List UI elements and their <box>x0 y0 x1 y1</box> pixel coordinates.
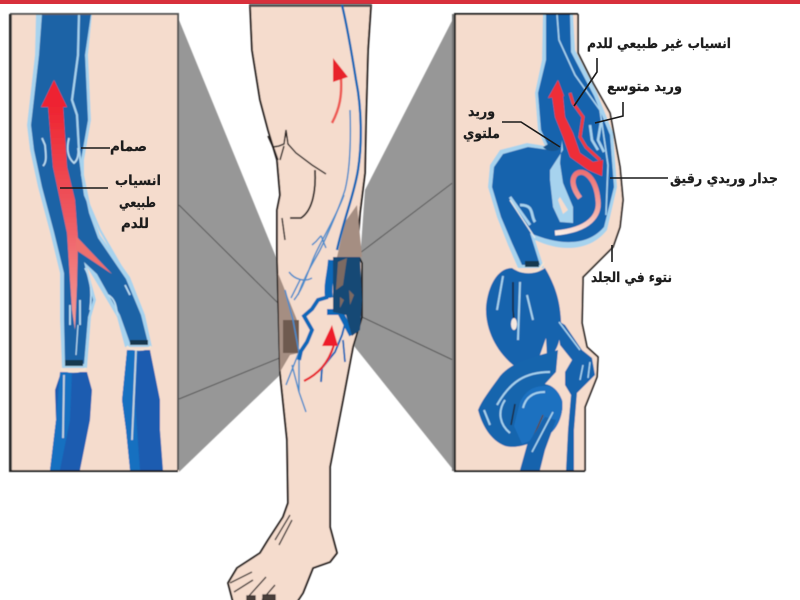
varicose vein on leg <box>299 260 352 382</box>
coil two <box>478 350 563 447</box>
valve ring and dark band <box>525 261 539 267</box>
knee lines <box>268 130 326 240</box>
label: normal blood flow: طبيعي <box>119 195 156 211</box>
transparent cone tip right <box>337 205 362 257</box>
lower left vein <box>50 372 92 470</box>
label: normal blood flow: للدم <box>121 216 149 232</box>
upper bulge blue <box>492 14 614 265</box>
healthy vein blue <box>31 14 148 364</box>
upper bulge light wall <box>488 14 617 268</box>
label: dilated vein: وريد متوسع <box>607 79 682 95</box>
lower right vein <box>122 350 163 470</box>
toes <box>230 515 292 600</box>
label: twisted vein: وريد <box>468 104 495 120</box>
valve cusps <box>42 138 78 166</box>
red arrow lower <box>304 325 338 381</box>
red arrow upper <box>332 58 348 123</box>
healthy vein light wall <box>27 14 152 368</box>
abnormal flow arrows <box>548 80 603 233</box>
dark varicose cluster <box>333 257 362 336</box>
panel: healthy vein <box>10 14 179 471</box>
label: thin vein wall: جدار وريدي رقيق <box>670 171 778 188</box>
transparent cone tip left <box>278 273 299 372</box>
labels: all text <box>110 36 778 286</box>
skin outline <box>578 14 623 471</box>
label: abnormal blood flow: انسياب غير طبيعي للدم <box>587 36 731 52</box>
valve cusps <box>550 140 573 223</box>
label: twisted vein <box>463 104 500 143</box>
main saphenous vein <box>337 5 361 250</box>
exit tube <box>520 417 556 470</box>
panel frame <box>11 14 178 470</box>
left zoom cone <box>179 20 285 472</box>
label: twisted vein: ملتوي <box>463 126 500 143</box>
label: normal blood flow <box>115 173 161 232</box>
label: normal blood flow: انسياب <box>115 173 161 189</box>
panel: varicose vein <box>453 14 623 471</box>
thin veins <box>285 110 350 412</box>
normal flow arrow <box>41 80 112 330</box>
leg illustration <box>228 4 371 600</box>
inner branch valves <box>70 268 130 325</box>
dark box left <box>283 320 299 353</box>
light inner stripe <box>70 14 121 264</box>
coil one <box>486 268 561 366</box>
group: whole illustration <box>10 4 623 600</box>
small side vein <box>557 320 595 470</box>
label: skin bulge: نتوء في الجلد <box>591 270 672 286</box>
valve rings <box>61 368 86 372</box>
leader lines <box>60 58 668 262</box>
panel frame <box>455 14 585 471</box>
right zoom cone <box>354 15 455 472</box>
label: valve: صمام <box>110 139 147 155</box>
top red bar <box>0 0 800 4</box>
leg outline <box>228 5 371 600</box>
